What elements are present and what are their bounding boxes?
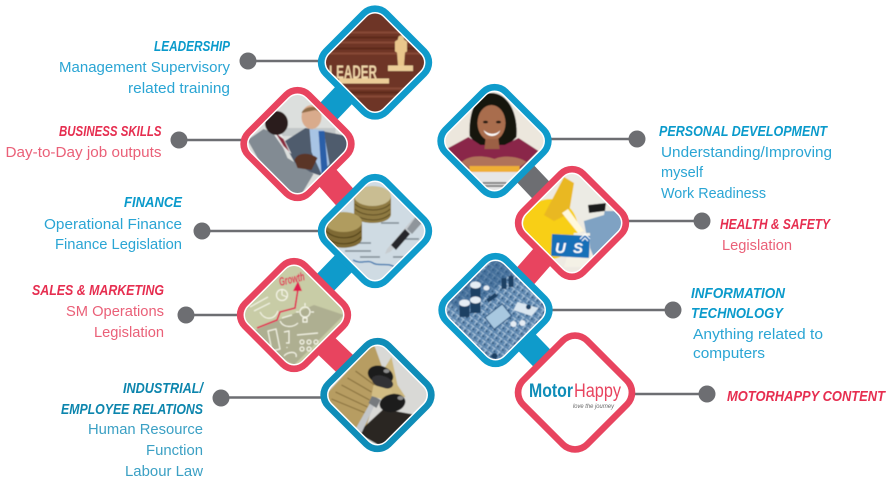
text block: finance (44, 195, 183, 253)
connector line and dot (178, 306, 240, 324)
text block: information technology (691, 286, 823, 362)
line 2: Function (146, 443, 203, 459)
panel: leadership (60, 5, 432, 120)
text block: health and safety (720, 217, 831, 254)
connector line and dot (170, 132, 245, 148)
line 2: Legislation (94, 325, 164, 341)
line 1: Day-to-Day job outputs (6, 145, 162, 161)
heading: LEADERSHIP (154, 39, 230, 55)
connector band: personal to health (494, 141, 572, 223)
heading: PERSONAL DEVELOPMENT (659, 124, 828, 140)
line 1: Understanding/Improving (661, 145, 832, 161)
line 3: Work Readiness (661, 186, 766, 202)
diamond photo: hard hat and work gear (514, 166, 630, 280)
line 1: Human Resource (88, 422, 203, 438)
connector band: IT to MotorHappy (496, 310, 575, 392)
line 1: SM Operations (66, 304, 164, 320)
logo tagline: love the journey (573, 404, 615, 410)
connector line and dot (194, 222, 320, 240)
line 3: Labour Law (125, 464, 204, 480)
connector line and dot (240, 52, 322, 70)
line 1: Legislation (722, 238, 792, 254)
heading: HEALTH & SAFETY (720, 217, 831, 233)
line 2: myself (661, 165, 704, 181)
panel: personal development (437, 84, 831, 198)
panel: MotorHappy content (506, 324, 886, 461)
text block: sales and marketing (32, 283, 164, 341)
connector line and dot (549, 130, 646, 148)
logo wordmark: Motor (529, 381, 574, 402)
connector band: health to IT (496, 223, 572, 310)
diamond photo: growth sketch: Growth (278, 269, 306, 289)
panel: sales and marketing (32, 258, 352, 372)
line 1: Management Supervisory (59, 60, 231, 76)
panel: information technology (438, 252, 822, 368)
connector line and dot (632, 386, 716, 402)
line 1: Anything related to (693, 327, 823, 343)
diamond photo: hard hat and work gear: US (555, 240, 583, 257)
line 1: Operational Finance (44, 217, 182, 233)
panel: health and safety (514, 166, 831, 280)
heading line 1: INDUSTRIAL/ (123, 381, 205, 397)
connector band: leadership to business skills (298, 62, 375, 144)
diamond photo: circuit board (438, 252, 553, 368)
connector line and dot (550, 302, 682, 318)
heading: SALES & MARKETING (32, 283, 164, 299)
line 2: related training (128, 81, 230, 97)
line 2: computers (693, 346, 765, 362)
diamond photo: businessmen (240, 86, 355, 202)
line 2: Finance Legislation (55, 237, 182, 253)
text block: industrial and employee relations (61, 381, 205, 480)
connector band: business skills to finance (298, 144, 375, 231)
diamond photo: coins and pen (318, 174, 432, 288)
heading line 2: TECHNOLOGY (691, 306, 784, 322)
text block: business skills (6, 124, 162, 161)
panel: finance (44, 174, 432, 288)
heading line 1: INFORMATION (691, 286, 785, 302)
connector band: sales to industrial (294, 315, 378, 395)
heading: FINANCE (124, 195, 183, 211)
panel: industrial and employee relations (61, 330, 443, 480)
diamond photo: leader steps: LEADER (329, 62, 377, 82)
heading: BUSINESS SKILLS (59, 124, 162, 140)
diamond photo: smiling woman (437, 84, 552, 198)
connector band: finance to sales (294, 231, 375, 315)
diamond photo: growth sketch (236, 258, 352, 372)
text block: personal development (659, 124, 832, 202)
logo wordmark second part: Happy (574, 381, 621, 402)
diamond logo: MotorHappy (506, 324, 644, 461)
connector line and dot (626, 212, 710, 230)
heading line 2: EMPLOYEE RELATIONS (61, 402, 203, 418)
panel: business skills (6, 86, 355, 202)
connector line and dot (212, 390, 323, 406)
text block: leadership (59, 39, 231, 97)
diamond photo: gavel (320, 338, 435, 452)
diamond photo: leader steps (318, 5, 432, 120)
